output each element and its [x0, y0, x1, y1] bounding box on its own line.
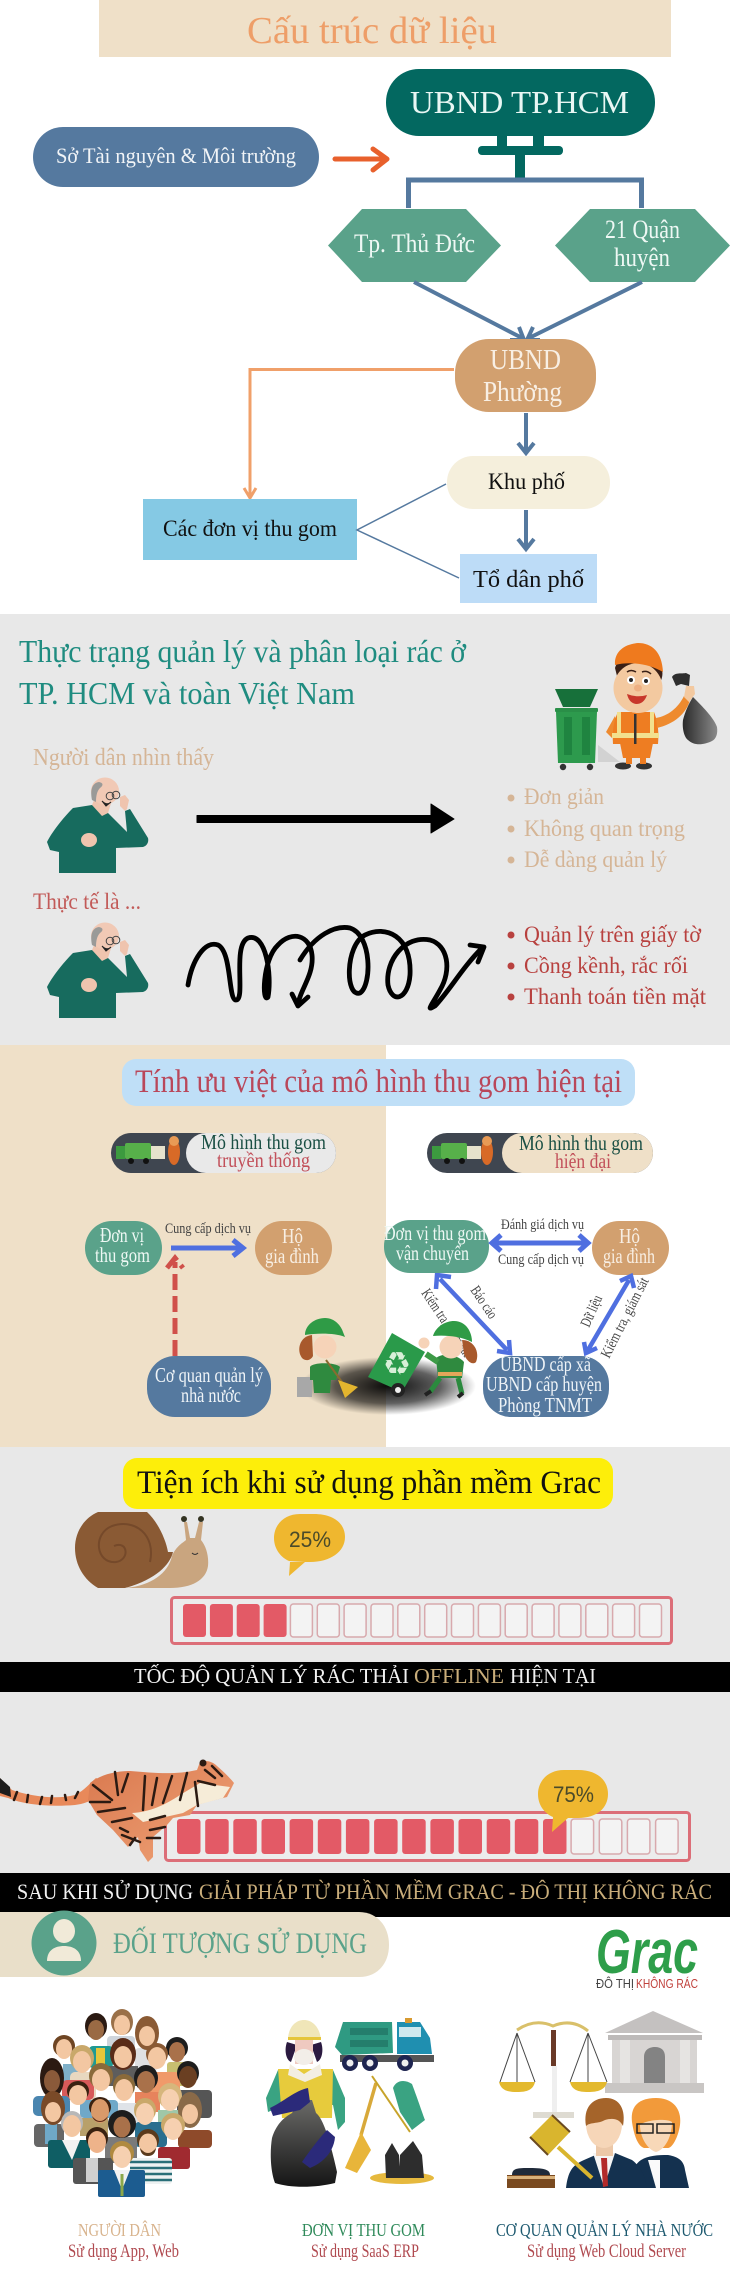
heading: current state: TP. HCM và toàn Việt Nam: [19, 675, 355, 711]
text: in reality: Thực tế là ...: [33, 889, 141, 914]
node: Tp. Thủ Đức: [328, 209, 501, 282]
arrow: districts to ward: [527, 282, 642, 340]
node: collector and transporter, modern: Đơn vị thu gom: [384, 1221, 486, 1245]
badge: modern model: hiện đại: [555, 1149, 611, 1173]
node: collector, traditional: thu gom: [95, 1243, 150, 1267]
node: household, modern: gia đình: [603, 1244, 655, 1268]
figures: two collector girls with bin: ♻: [385, 1351, 409, 1378]
arrow: ward to quarter: [518, 413, 534, 453]
node: Tổ dân phố: [460, 554, 597, 603]
label: data: Dữ liệu: [578, 1293, 606, 1330]
node: state authority: nhà nước: [181, 1383, 241, 1407]
node: 21 Quận huyện: [555, 209, 730, 282]
caption: collectors: ĐƠN VỊ THU GOM: [302, 2220, 425, 2240]
label: provide service: Cung cấp dịch vụ: [165, 1221, 251, 1237]
arrow: orange to city: [335, 149, 387, 170]
title band: Cấu trúc dữ liệu: [247, 10, 497, 52]
node: Các đơn vị thu gom: [143, 499, 357, 560]
heading: current state: [19, 633, 467, 711]
node: commune district authorities: UBND cấp xã: [500, 1352, 592, 1376]
label: report: Báo cáo: [467, 1283, 500, 1322]
heading: target users: [0, 1910, 389, 1977]
arrow: Thủ Đức to ward: [414, 282, 524, 340]
heading: model advantages: [122, 1059, 635, 1106]
list: reality: [508, 922, 707, 1009]
icon: running tiger: [0, 1760, 234, 1862]
label: inspect left: Kiểm tra, giám sát: [418, 1286, 475, 1360]
node: Các đơn vị thu gom: Các đơn vị thu gom: [163, 516, 337, 541]
illustration: justice, court and officials: [499, 2011, 704, 2188]
heading: target users: ĐỐI TƯỢNG SỬ DỤNG: [113, 1926, 367, 1960]
figures: two collector girls with bin: [297, 1318, 477, 1415]
arrow: ward to collectors: [244, 370, 454, 498]
arrow: service to household: [171, 1240, 243, 1256]
list: seen as simple: Không quan trọng: [524, 816, 685, 841]
banner: offline speed: TỐC ĐỘ QUẢN LÝ RÁC THẢI: [134, 1664, 409, 1688]
badge: traditional model: Mô hình thu gom: [201, 1130, 326, 1154]
arrow: tangled spiral: [188, 927, 484, 1008]
node: 21 Quận huyện: 21 Quận: [605, 215, 680, 244]
node: household, traditional: Hộ: [282, 1224, 303, 1248]
heading: current state: Thực trạng quản lý và phân loại rác ở: [19, 633, 467, 669]
node: Sở Tài nguyên và Môi trường: Sở Tài nguyên & Môi trường: [56, 143, 296, 168]
icon: green bin: [555, 689, 620, 770]
icon: thinking man again: [47, 922, 148, 1018]
node: commune district authorities: UBND cấp huyện: [486, 1372, 602, 1396]
heading: benefits: [123, 1458, 613, 1509]
node: commune district authorities: Phòng TNMT: [498, 1393, 592, 1417]
panel: current state: [0, 614, 730, 1045]
panel: data structure: [33, 0, 730, 603]
badge: traditional model: truyền thống: [217, 1148, 310, 1172]
node: commune district authorities: [483, 1352, 609, 1417]
node: collector and transporter, modern: [384, 1220, 489, 1273]
connector: city to districts: [408, 136, 642, 208]
progress bar: 25 percent: [172, 1598, 672, 1644]
node: Khu phố: Khu phố: [488, 469, 565, 494]
panel: software benefits: [0, 1447, 730, 1917]
banner: after using Grac: [0, 1873, 730, 1917]
arrow: dashed authority: [167, 1258, 183, 1356]
caption: state authority: [496, 2219, 713, 2262]
arrow: straight: [197, 804, 454, 833]
title band: [99, 0, 671, 57]
label: evaluate service: Đánh giá dịch vụ: [501, 1217, 584, 1233]
badge: traditional model: [111, 1130, 336, 1173]
illustration: crowd of residents: [33, 2009, 212, 2197]
badge: modern model: Mô hình thu gom: [519, 1131, 643, 1155]
icon: snail: [75, 1512, 208, 1588]
node: collector, traditional: Đơn vị: [100, 1223, 144, 1247]
panel: target users: [0, 1910, 713, 2262]
connector: collectors to quarter and neighbourhood: [357, 484, 459, 578]
node: collector and transporter, modern: vận chuyển: [396, 1241, 469, 1265]
callout: 25 percent: 25%: [289, 1527, 331, 1552]
node: state authority: Cơ quan quản lý: [155, 1363, 263, 1387]
list: reality: Thanh toán tiền mặt: [524, 984, 707, 1009]
icon: sanitation worker with bag: [606, 643, 717, 770]
node: Sở Tài nguyên và Môi trường: [33, 127, 319, 187]
caption: residents: [68, 2219, 179, 2262]
progress bar: 75 percent: [166, 1812, 690, 1860]
node: collector, traditional: [85, 1221, 162, 1275]
heading: benefits: Tiện ích khi sử dụng phần mềm Grac: [137, 1465, 601, 1501]
illustration: worker, truck, broom and bags: [266, 2018, 434, 2187]
node: 21 Quận huyện: huyện: [614, 243, 670, 272]
list: seen as simple: [508, 784, 685, 872]
node: UBND TP.HCM: [386, 69, 655, 136]
arrow: quarter to neighbourhood: [518, 510, 534, 549]
list: seen as simple: Đơn giản: [524, 784, 604, 809]
logo: Grac: KHÔNG RÁC: [636, 1976, 698, 1991]
text: what residents see: Người dân nhìn thấy: [33, 745, 214, 771]
caption: residents: Sử dụng App, Web: [68, 2241, 179, 2262]
callout: 75 percent: 75%: [553, 1782, 594, 1807]
panel: collection model comparison: [0, 1045, 730, 1447]
caption: collectors: Sử dụng SaaS ERP: [311, 2241, 419, 2262]
list: reality: Cồng kềnh, rắc rối: [524, 953, 688, 978]
node: UBND Phường: UBND: [490, 345, 561, 376]
banner: offline speed: [0, 1662, 730, 1692]
banner: after using Grac: SAU KHI SỬ DỤNG: [17, 1879, 193, 1904]
callout: 25 percent: [274, 1514, 345, 1576]
caption: state authority: Sử dụng Web Cloud Server: [527, 2241, 687, 2262]
label: inspect right: Kiểm tra, giám sát: [598, 1275, 653, 1361]
callout: 75 percent: [538, 1770, 608, 1832]
node: household, traditional: gia đình: [265, 1244, 319, 1268]
banner: offline speed: HIỆN TẠI: [510, 1664, 596, 1688]
node: household, modern: [592, 1221, 669, 1275]
node: Tổ dân phố: Tổ dân phố: [473, 567, 584, 593]
logo: Grac: ĐÔ THỊ: [596, 1976, 634, 1991]
caption: collectors: [302, 2220, 425, 2262]
icon: thinking man: [47, 778, 148, 873]
node: UBND Phường: [455, 339, 596, 412]
badge: modern model: [427, 1131, 653, 1173]
arrow: collector and household double: [492, 1235, 588, 1251]
list: seen as simple: Dễ dàng quản lý: [524, 847, 667, 872]
node: Tp. Thủ Đức: Tp. Thủ Đức: [354, 229, 475, 258]
node: Khu phố: [447, 456, 610, 509]
node: household, modern: Hộ: [619, 1224, 640, 1248]
node: UBND Phường: Phường: [483, 377, 562, 408]
heading: model advantages: Tính ưu việt của mô hình thu gom hiện tại: [135, 1064, 622, 1100]
label: provide service modern: Cung cấp dịch vụ: [498, 1252, 584, 1268]
node: state authority: [147, 1356, 271, 1417]
list: reality: Quản lý trên giấy tờ: [524, 922, 702, 947]
banner: offline speed: OFFLINE: [414, 1664, 504, 1688]
arrow: household to authorities double: [584, 1276, 634, 1353]
node: household, traditional: [255, 1221, 332, 1275]
caption: residents: NGƯỜI DÂN: [78, 2219, 161, 2240]
arrow: collector to district double: [436, 1275, 510, 1353]
node: UBND TP.HCM: UBND TP.HCM: [410, 84, 629, 120]
